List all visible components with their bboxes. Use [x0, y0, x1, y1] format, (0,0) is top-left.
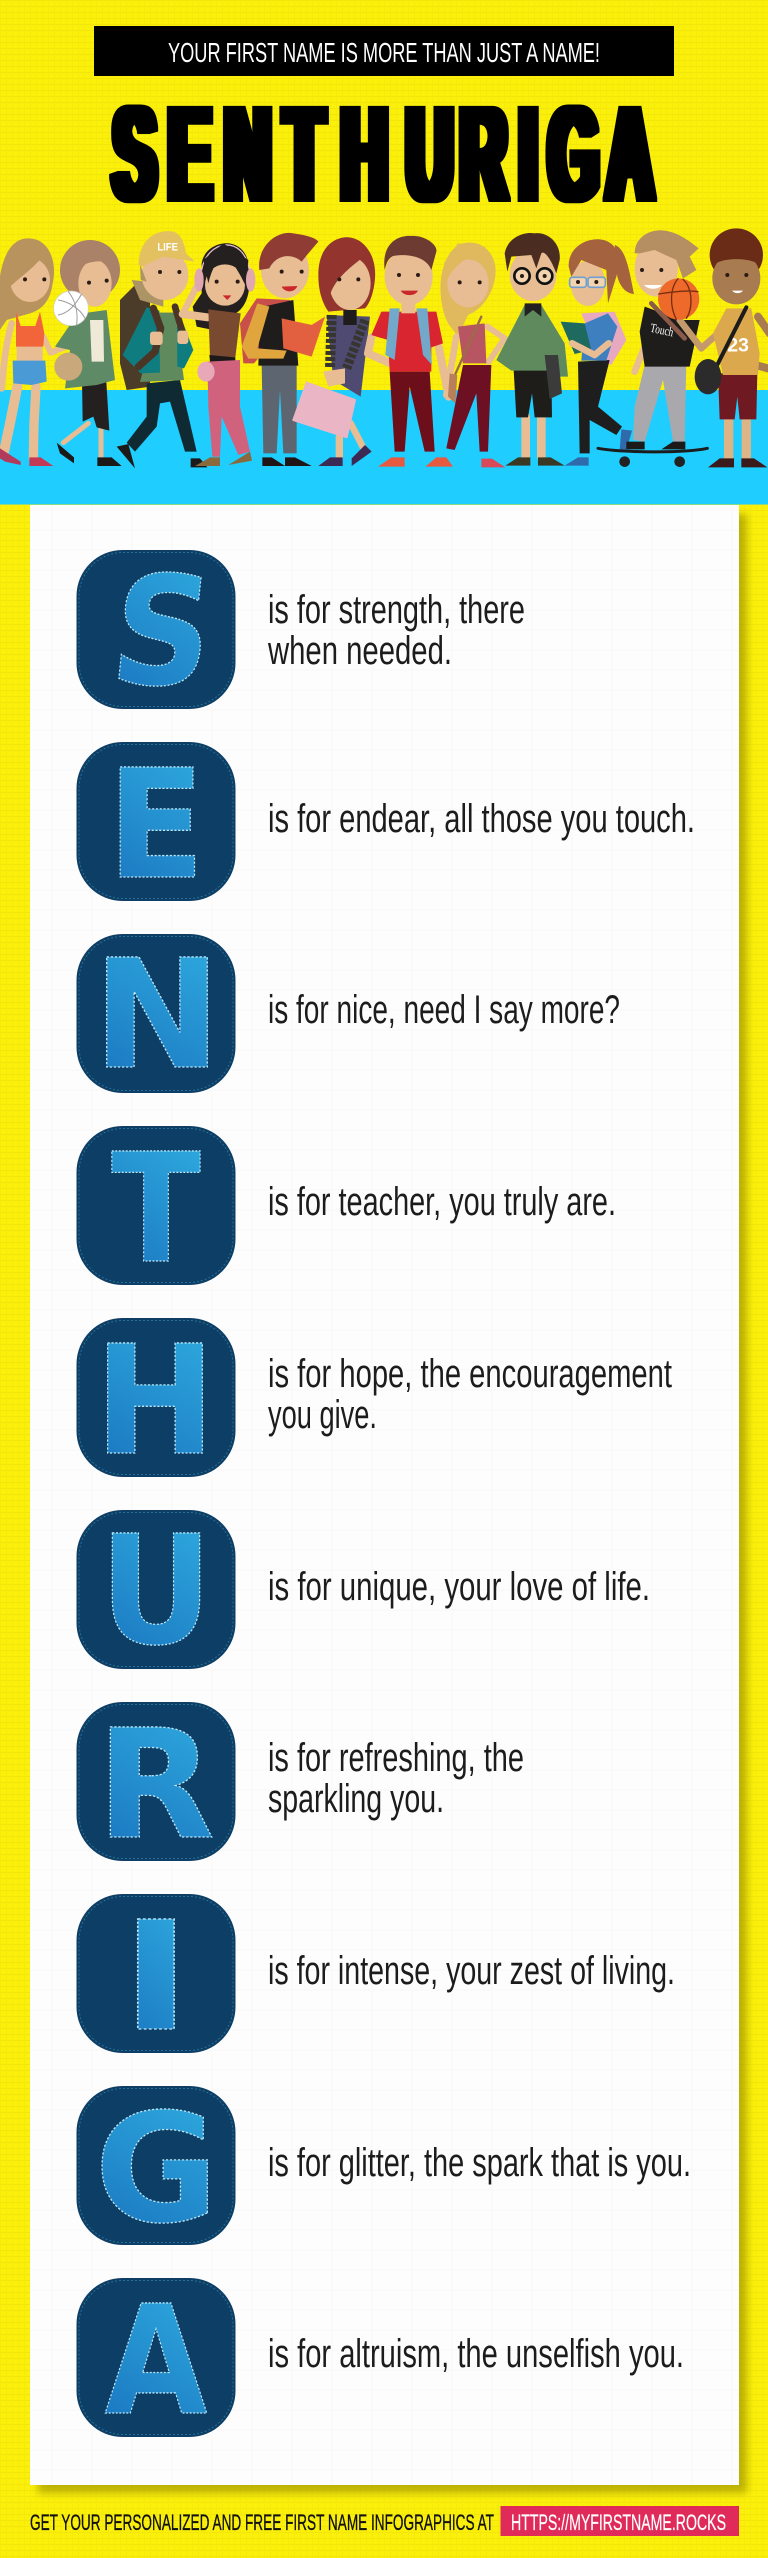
person: boy on skateboard with basketball — [598, 230, 718, 467]
text H: you give. — [268, 1393, 377, 1437]
person: girl with ponytail and tablet — [561, 239, 634, 466]
person: boy in basketball jersey — [695, 228, 768, 467]
person: boy with book — [240, 233, 325, 466]
title: SENTHURIGA — [113, 80, 653, 229]
person: red-haired girl with bag — [293, 237, 375, 466]
row R — [76, 1696, 524, 1873]
main white panel — [30, 505, 739, 2485]
tile E — [76, 737, 236, 913]
illustration: group of people, right half — [368, 228, 768, 467]
blue floor band — [0, 390, 768, 504]
tile S: S — [104, 545, 221, 720]
subtitle banner — [94, 26, 674, 76]
tile G: G — [95, 2081, 218, 2257]
tile N: N — [93, 926, 221, 1103]
person: girl with volleyball — [54, 240, 122, 466]
row I — [76, 1889, 675, 2065]
person: boy on skateboard with basketball: Touch — [649, 321, 675, 340]
text N: is for nice, need I say more? — [268, 988, 620, 1032]
text S: is for strength, there — [268, 588, 525, 632]
tile A — [76, 2273, 236, 2449]
tile I: I — [120, 1889, 192, 2065]
person: boy in basketball jersey: 23 — [727, 336, 749, 357]
person: backpacker in cap — [117, 231, 207, 468]
row G — [76, 2081, 691, 2257]
tile E: E — [107, 737, 205, 913]
person: girl with headphones — [183, 243, 255, 466]
row E — [76, 737, 695, 913]
tile T: T — [111, 1122, 201, 1297]
row H — [76, 1313, 672, 1489]
row N — [76, 926, 620, 1103]
tile T — [76, 1122, 236, 1297]
person: boy with glasses — [496, 233, 568, 466]
text S: when needed. — [267, 629, 452, 673]
text T: is for teacher, you truly are. — [268, 1180, 616, 1224]
person: girl in orange top — [0, 238, 78, 466]
illustration: group of people — [0, 231, 375, 468]
tile H: H — [94, 1313, 216, 1489]
panel shadow — [38, 514, 747, 2493]
row S — [76, 545, 525, 720]
text R: is for refreshing, the — [268, 1736, 524, 1780]
tile I — [76, 1889, 236, 2065]
tile U: U — [100, 1504, 212, 1679]
row U — [76, 1504, 650, 1679]
person: blonde girl — [440, 243, 505, 467]
row A — [76, 2273, 684, 2449]
tile A: A — [105, 2273, 207, 2449]
person: boy in red shirt — [368, 236, 453, 467]
row T — [76, 1122, 616, 1297]
text R: sparkling you. — [268, 1777, 444, 1821]
person: backpacker in cap: LIFE — [157, 242, 178, 254]
tile R: R — [96, 1696, 215, 1873]
